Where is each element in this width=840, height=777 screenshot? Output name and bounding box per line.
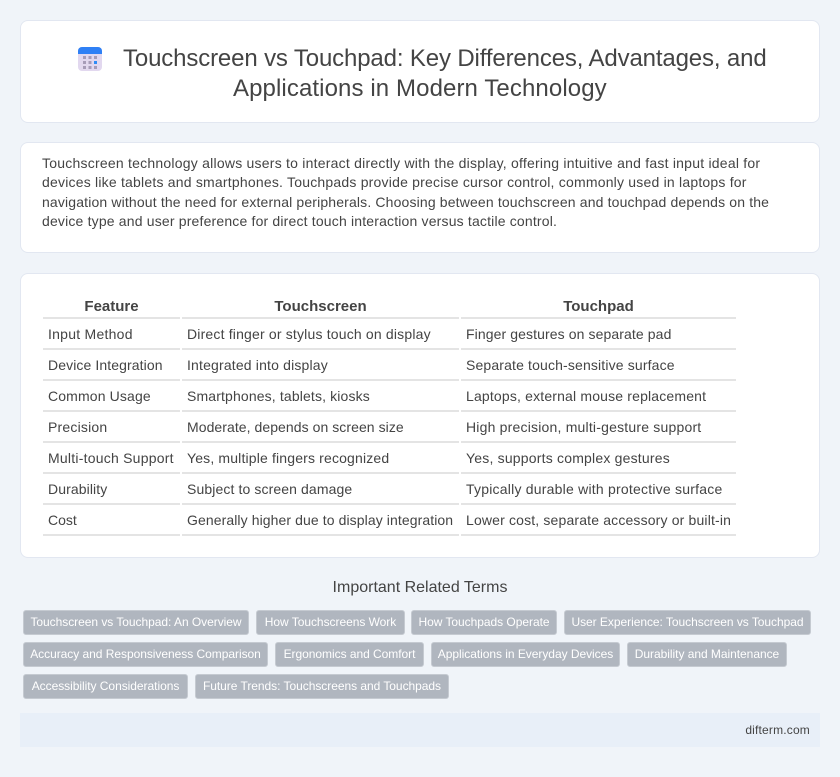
tag [627,642,787,667]
row: common usage [43,388,736,412]
row: cost: Lower cost, separate accessory or built-in [466,512,731,528]
row: cost: Generally higher due to display integration [187,512,453,528]
footer credit: difterm.com [745,723,810,737]
row: multi-touch support [43,450,736,474]
intro text: devices like tablets and smartphones. Touchpads provide precise cursor control, commonly used in laptops for [42,174,747,190]
row: durability: Subject to screen damage [187,481,352,497]
tag: How Touchscreens Work [265,615,396,629]
tag: Durability and Maintenance [635,647,779,661]
tag [23,610,249,635]
tag: Accuracy and Responsiveness Comparison [30,647,261,661]
tag: Applications in Everyday Devices [438,647,613,661]
intro text: device type and user preference for direct touch interaction versus tactile control. [42,213,557,229]
row: precision: High precision, multi-gesture support [466,419,701,435]
row: durability: Typically durable with protective surface [466,481,722,497]
intro text: Touchscreen technology allows users to interact directly with the display, offering intuitive and fast input ideal for [42,155,760,171]
tag: Future Trends: Touchscreens and Touchpads [203,679,441,693]
title [123,45,767,102]
row: device integration: Device Integration [48,357,163,373]
intro text [42,155,769,229]
row: common usage: Common Usage [48,388,151,404]
row: input method [43,326,736,350]
tag: Touchscreen vs Touchpad: An Overview [30,615,242,629]
tag: How Touchpads Operate [418,615,550,629]
icon: calendar grid [78,47,102,71]
tag [23,642,268,667]
row: durability: Durability [48,481,107,497]
row: device integration [43,357,736,381]
footer bar [20,713,820,747]
tag: Ergonomics and Comfort [284,647,415,661]
row: cost [43,512,736,536]
table header: Touchpad [563,298,634,315]
row: precision: Moderate, depends on screen size [187,419,404,435]
row: device integration: Separate touch-sensitive surface [466,357,675,373]
tag [564,610,811,635]
tag [256,610,405,635]
panel: comparison table [20,273,820,558]
tag [411,610,557,635]
row: common usage: Smartphones, tablets, kiosks [187,388,370,404]
row: cost: Cost [48,512,77,528]
heading: related terms: Important Related Terms [333,579,507,596]
row: multi-touch support: Yes, multiple fingers recognized [187,450,389,466]
row: precision: Precision [48,419,107,435]
panel: title header [20,20,820,123]
tag [275,642,424,667]
tag [431,642,620,667]
tag group: related terms [23,610,811,699]
row: input method: Finger gestures on separate pad [466,326,671,342]
table header: Touchscreen [274,298,367,315]
row: multi-touch support: Yes, supports complex gestures [466,450,670,466]
title: Touchscreen vs Touchpad: Key Differences, Advantages, and [123,45,767,72]
tag: Accessibility Considerations [32,679,179,693]
tag [23,674,188,699]
row: input method: Input Method [48,326,133,342]
tag: User Experience: Touchscreen vs Touchpad [571,615,804,629]
row: multi-touch support: Multi-touch Support [48,450,174,466]
table header: Feature [84,298,139,315]
row: common usage: Laptops, external mouse replacement [466,388,706,404]
intro text: navigation without the need for external peripherals. Choosing between touchscreen and touchpad depends on the [42,194,769,210]
panel: intro paragraph [20,142,820,253]
row: durability [43,481,736,505]
title: Applications in Modern Technology [233,75,607,102]
row: precision [43,419,736,443]
table header [43,298,736,319]
row: device integration: Integrated into display [187,357,328,373]
tag [195,674,449,699]
row: input method: Direct finger or stylus touch on display [187,326,431,342]
